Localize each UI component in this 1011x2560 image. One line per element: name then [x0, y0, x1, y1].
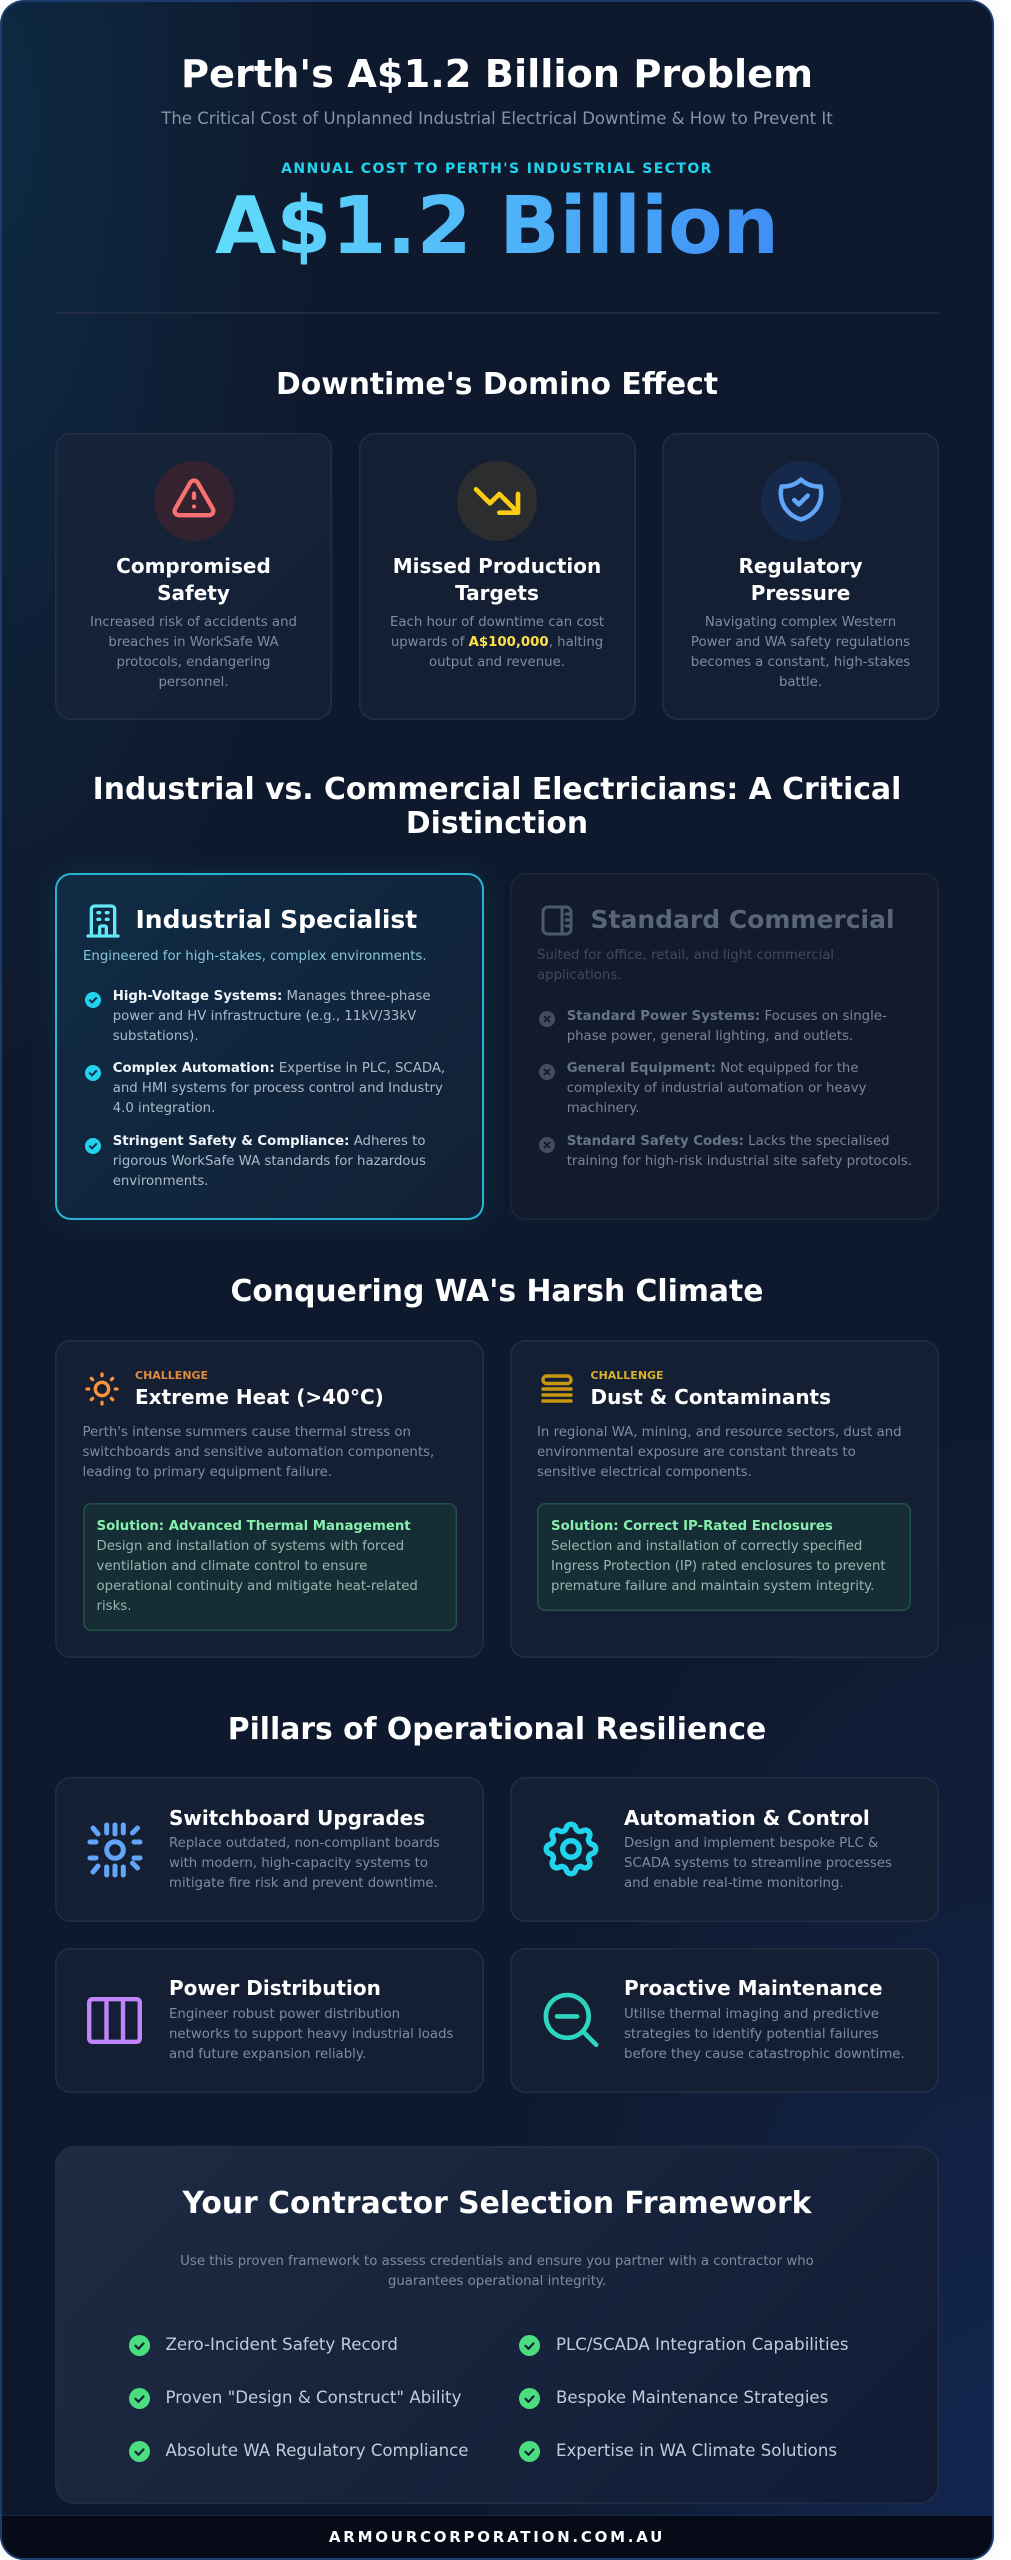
card text: Increased risk of accidents and	[90, 615, 297, 630]
card: proactive maintenance	[510, 1948, 938, 2093]
card text: strategies to identify potential failures	[624, 2027, 879, 2042]
panel: industrial specialist	[55, 873, 484, 1220]
card text: before they cause catastrophic downtime.	[624, 2047, 905, 2062]
card title: Missed Production	[393, 554, 601, 578]
card: regulatory pressure	[662, 433, 939, 720]
challenge title: Extreme Heat (>40°C)	[135, 1385, 384, 1409]
cross item 2	[539, 1061, 866, 1116]
solution box	[537, 1503, 911, 1611]
cross item 1	[539, 1009, 887, 1044]
card title: Compromised	[116, 554, 271, 578]
challenge text: environmental exposure are constant threats to	[537, 1445, 856, 1460]
check item 3: environments.	[113, 1174, 209, 1189]
card text: Replace outdated, non-compliant boards	[169, 1836, 440, 1851]
card text: protocols, endangering	[117, 655, 270, 670]
card text: output and revenue.	[429, 655, 565, 670]
check item 3: rigorous WorkSafe WA standards for hazardous	[113, 1154, 426, 1169]
title: Perth's A$1.2 Billion Problem	[181, 52, 813, 97]
cross item 2: machinery.	[567, 1101, 640, 1116]
card text: battle.	[779, 675, 822, 690]
heading: industrial vs commercial	[93, 772, 901, 841]
icon: dust layers	[541, 1374, 573, 1403]
challenge title: Dust & Contaminants	[590, 1385, 831, 1409]
stat label: ANNUAL COST TO PERTH'S INDUSTRIAL SECTOR	[281, 161, 713, 177]
check item 1	[85, 989, 431, 1044]
icon: switchboard	[88, 1822, 142, 1878]
check item 2	[85, 1061, 445, 1116]
card text: networks to support heavy industrial loads	[169, 2027, 453, 2042]
challenge text	[537, 1425, 902, 1480]
criterion 6: Expertise in WA Climate Solutions	[556, 2441, 837, 2460]
solution box: risks.	[96, 1599, 131, 1614]
footer	[2, 2515, 992, 2558]
card: extreme heat	[55, 1340, 484, 1658]
solution box: Ingress Protection (IP) rated enclosures to prevent	[551, 1559, 886, 1574]
cross item 3	[539, 1134, 912, 1169]
solution box: ventilation and climate control to ensure	[96, 1559, 367, 1574]
heading: pillars: Pillars of Operational Resilience	[228, 1712, 766, 1746]
challenge text: Perth's intense summers cause thermal stress on	[82, 1425, 411, 1440]
solution box: Selection and installation of correctly specified	[551, 1539, 862, 1554]
solution box: operational continuity and mitigate heat-related	[96, 1579, 418, 1594]
card text: Each hour of downtime can cost	[390, 615, 604, 630]
card text	[169, 1836, 440, 1891]
card: missed production	[358, 433, 636, 720]
cross item 1: phase power, general lighting, and outlets.	[567, 1029, 853, 1044]
solution box: Solution: Correct IP-Rated Enclosures	[551, 1519, 833, 1534]
framework title: Your Contractor Selection Framework	[183, 2186, 811, 2221]
card text: Design and implement bespoke PLC &	[624, 1836, 878, 1851]
check item 3	[85, 1134, 426, 1189]
headline stat: A$1.2 Billion	[215, 179, 779, 272]
card: automation	[510, 1777, 938, 1922]
solution box	[82, 1503, 456, 1631]
card text: upwards of A$100,000, halting	[391, 635, 603, 650]
heading: climate: Conquering WA's Harsh Climate	[231, 1274, 763, 1308]
panel subtitle	[537, 948, 834, 983]
solution box: premature failure and maintain system integrity.	[551, 1579, 874, 1594]
card text	[169, 2007, 453, 2062]
icon: gear	[544, 1822, 598, 1876]
challenge label: CHALLENGE	[135, 1369, 208, 1382]
check item 1: High-Voltage Systems: Manages three-phase	[113, 989, 431, 1004]
card text: Utilise thermal imaging and predictive	[624, 2007, 879, 2022]
card text: mitigate fire risk and prevent downtime.	[169, 1876, 438, 1891]
check item 2: Complex Automation: Expertise in PLC, SCADA,	[113, 1061, 445, 1076]
challenge text: sensitive electrical components.	[537, 1465, 752, 1480]
check item 1: substations).	[113, 1029, 199, 1044]
challenge text: switchboards and sensitive automation components,	[82, 1445, 434, 1460]
panel subtitle: Suited for office, retail, and light commercial	[537, 948, 834, 963]
card text: SCADA systems to streamline processes	[624, 1856, 892, 1871]
card: dust	[510, 1340, 938, 1658]
card text: Power and WA safety regulations	[691, 635, 910, 650]
card text: personnel.	[158, 675, 229, 690]
cross item 3: training for high-risk industrial site safety protocols.	[567, 1154, 912, 1169]
card text: Navigating complex Western	[705, 615, 896, 630]
card title	[393, 554, 601, 604]
check item 2: and HMI systems for process control and Industry	[113, 1081, 443, 1096]
card title: Switchboard Upgrades	[169, 1806, 425, 1830]
card: switchboard upgrades	[55, 1777, 484, 1922]
icon: trending down	[457, 461, 537, 541]
card title: Regulatory	[738, 554, 863, 578]
card text: Engineer robust power distribution	[169, 2007, 400, 2022]
card title: Pressure	[751, 580, 850, 604]
challenge text: leading to primary equipment failure.	[82, 1465, 332, 1480]
cross item 2: General Equipment: Not equipped for the	[567, 1061, 859, 1076]
challenge text	[82, 1425, 434, 1480]
icon: warning triangle	[154, 461, 234, 541]
criterion 2: Proven "Design & Construct" Ability	[166, 2388, 461, 2407]
card text	[390, 615, 604, 670]
framework text: Use this proven framework to assess credentials and ensure you partner with a contractor who	[180, 2254, 814, 2269]
icon: sun	[85, 1372, 119, 1406]
card text: becomes a constant, high-stakes	[691, 655, 910, 670]
criterion 4: PLC/SCADA Integration Capabilities	[556, 2335, 848, 2354]
subtitle: The Critical Cost of Unplanned Industrial Electrical Downtime & How to Prevent It	[161, 109, 833, 128]
heading: industrial vs commercial: Distinction	[406, 806, 588, 841]
footer: ARMOURCORPORATION.COM.AU	[329, 2528, 665, 2546]
criterion 3: Absolute WA Regulatory Compliance	[166, 2441, 468, 2460]
panel subtitle: applications.	[537, 968, 622, 983]
panel title: Industrial Specialist	[136, 905, 417, 934]
solution box: Solution: Advanced Thermal Management	[96, 1519, 411, 1534]
card text	[691, 615, 910, 690]
card: power distribution	[55, 1948, 484, 2093]
heading: industrial vs commercial: Industrial vs. Commercial Electricians: A Critical	[93, 772, 901, 807]
card text: breaches in WorkSafe WA	[108, 635, 279, 650]
panel: standard commercial	[510, 873, 938, 1220]
card title	[738, 554, 863, 604]
icon: building	[86, 904, 120, 938]
solution box: Design and installation of systems with forced	[96, 1539, 404, 1554]
check item 2: 4.0 integration.	[113, 1101, 215, 1116]
card text: and future expansion reliably.	[169, 2047, 366, 2062]
icon: shield	[760, 461, 840, 541]
card title: Power Distribution	[169, 1976, 381, 2000]
card title	[116, 554, 271, 604]
panel subtitle: Engineered for high-stakes, complex environments.	[83, 949, 427, 964]
card title: Proactive Maintenance	[624, 1976, 883, 2000]
cross item 2: complexity of industrial automation or heavy	[567, 1081, 866, 1096]
cross item 1: Standard Power Systems: Focuses on single-	[567, 1009, 887, 1024]
criterion 1: Zero-Incident Safety Record	[166, 2335, 398, 2354]
heading: domino effect: Downtime's Domino Effect	[276, 366, 718, 402]
card title: Automation & Control	[624, 1806, 870, 1830]
icon: document	[542, 906, 572, 936]
check item 1: power and HV infrastructure (e.g., 11kV/33kV	[113, 1009, 416, 1024]
panel title: Standard Commercial	[590, 905, 895, 934]
card text	[624, 1836, 892, 1891]
card title: Safety	[157, 580, 230, 604]
cross item 3: Standard Safety Codes: Lacks the specialised	[567, 1134, 890, 1149]
panel: contractor selection framework	[55, 2146, 939, 2504]
challenge text: In regional WA, mining, and resource sectors, dust and	[537, 1425, 902, 1440]
card text: and enable real-time monitoring.	[624, 1876, 844, 1891]
card text	[624, 2007, 905, 2062]
framework text: guarantees operational integrity.	[388, 2274, 606, 2289]
card: compromised safety	[55, 433, 332, 720]
challenge label: CHALLENGE	[590, 1369, 664, 1382]
criterion 5: Bespoke Maintenance Strategies	[556, 2388, 828, 2407]
card text: with modern, high-capacity systems to	[169, 1856, 428, 1871]
check item 3: Stringent Safety & Compliance: Adheres to	[113, 1134, 425, 1149]
framework text	[180, 2254, 814, 2289]
icon: columns	[87, 1997, 142, 2044]
card title: Targets	[455, 580, 539, 604]
icon: magnifier	[544, 1992, 598, 2047]
card text	[90, 615, 297, 690]
